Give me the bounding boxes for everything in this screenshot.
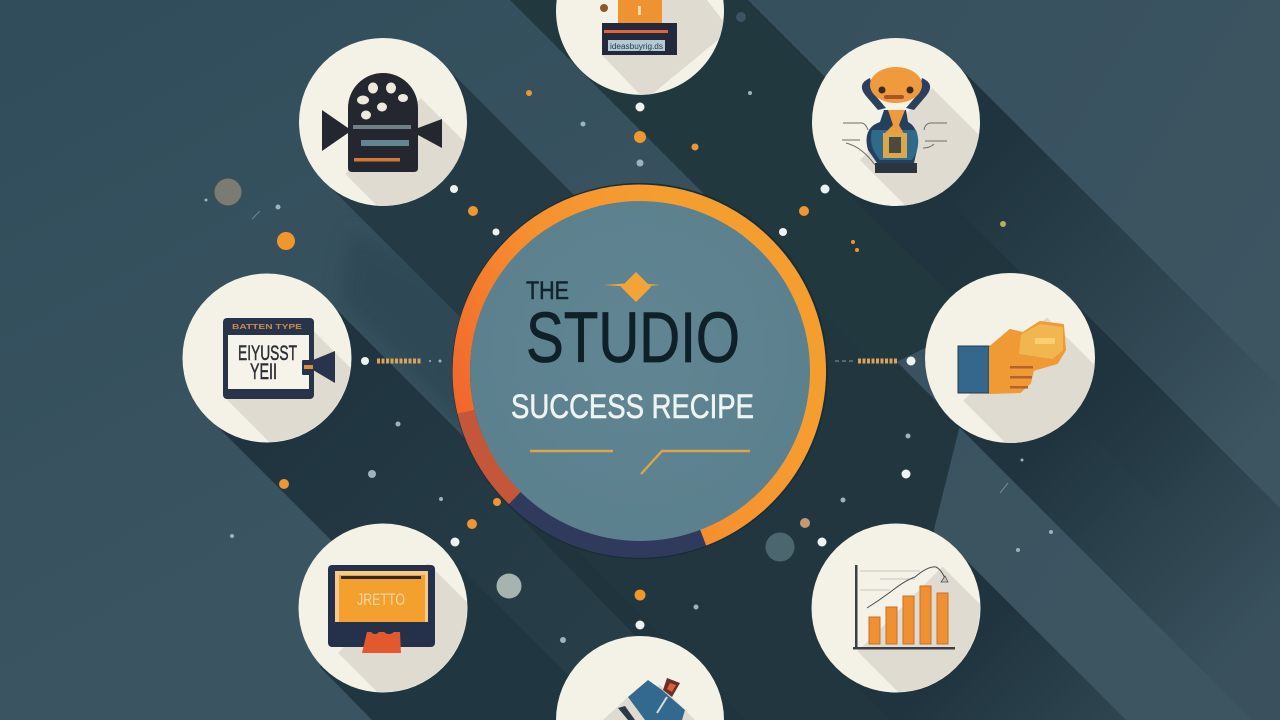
ring: segmented progress border [461, 193, 817, 549]
subtitle: SUCCESS RECIPE: SUCCESS RECIPE [511, 388, 754, 426]
icon: monitor: JRETTO [357, 590, 405, 609]
icon: film camera [322, 73, 442, 172]
node: top-right – trophy figure [812, 38, 980, 206]
icon: plaque [600, 0, 677, 55]
icon: trophy with smiling head [842, 67, 947, 173]
icon: screen: BATTEN TYPE [232, 324, 302, 331]
icon: screen: EIYUSST [238, 342, 297, 365]
node: top-left – film camera [299, 38, 467, 206]
node: right – hand holding book [925, 273, 1095, 443]
decorative underline with tick [530, 451, 750, 474]
icon: screen [223, 318, 335, 399]
bar chart: rising bars and trend line [853, 565, 955, 650]
icon: plaque: ideasbuyrig.ds [610, 42, 663, 51]
node: left – storyboard screen with megaphone [182, 274, 352, 442]
node: top – award plaque [556, 0, 730, 100]
scattered dots and connector marks [204, 12, 1053, 643]
icon: orange diamond ornament [604, 272, 660, 302]
icon: screen: YEII [250, 359, 277, 384]
node: bottom – clapper and tools [556, 636, 724, 720]
icon: monitor [328, 565, 435, 653]
node: bottom-left – monitor [298, 524, 468, 692]
icon: fist and book [958, 322, 1065, 393]
node: bottom-right – bar chart [812, 524, 980, 692]
icon: blue tool with red tag [618, 678, 685, 720]
central hub [452, 183, 828, 559]
title: THE: THE [526, 277, 569, 305]
title: STUDIO: STUDIO [526, 299, 740, 378]
